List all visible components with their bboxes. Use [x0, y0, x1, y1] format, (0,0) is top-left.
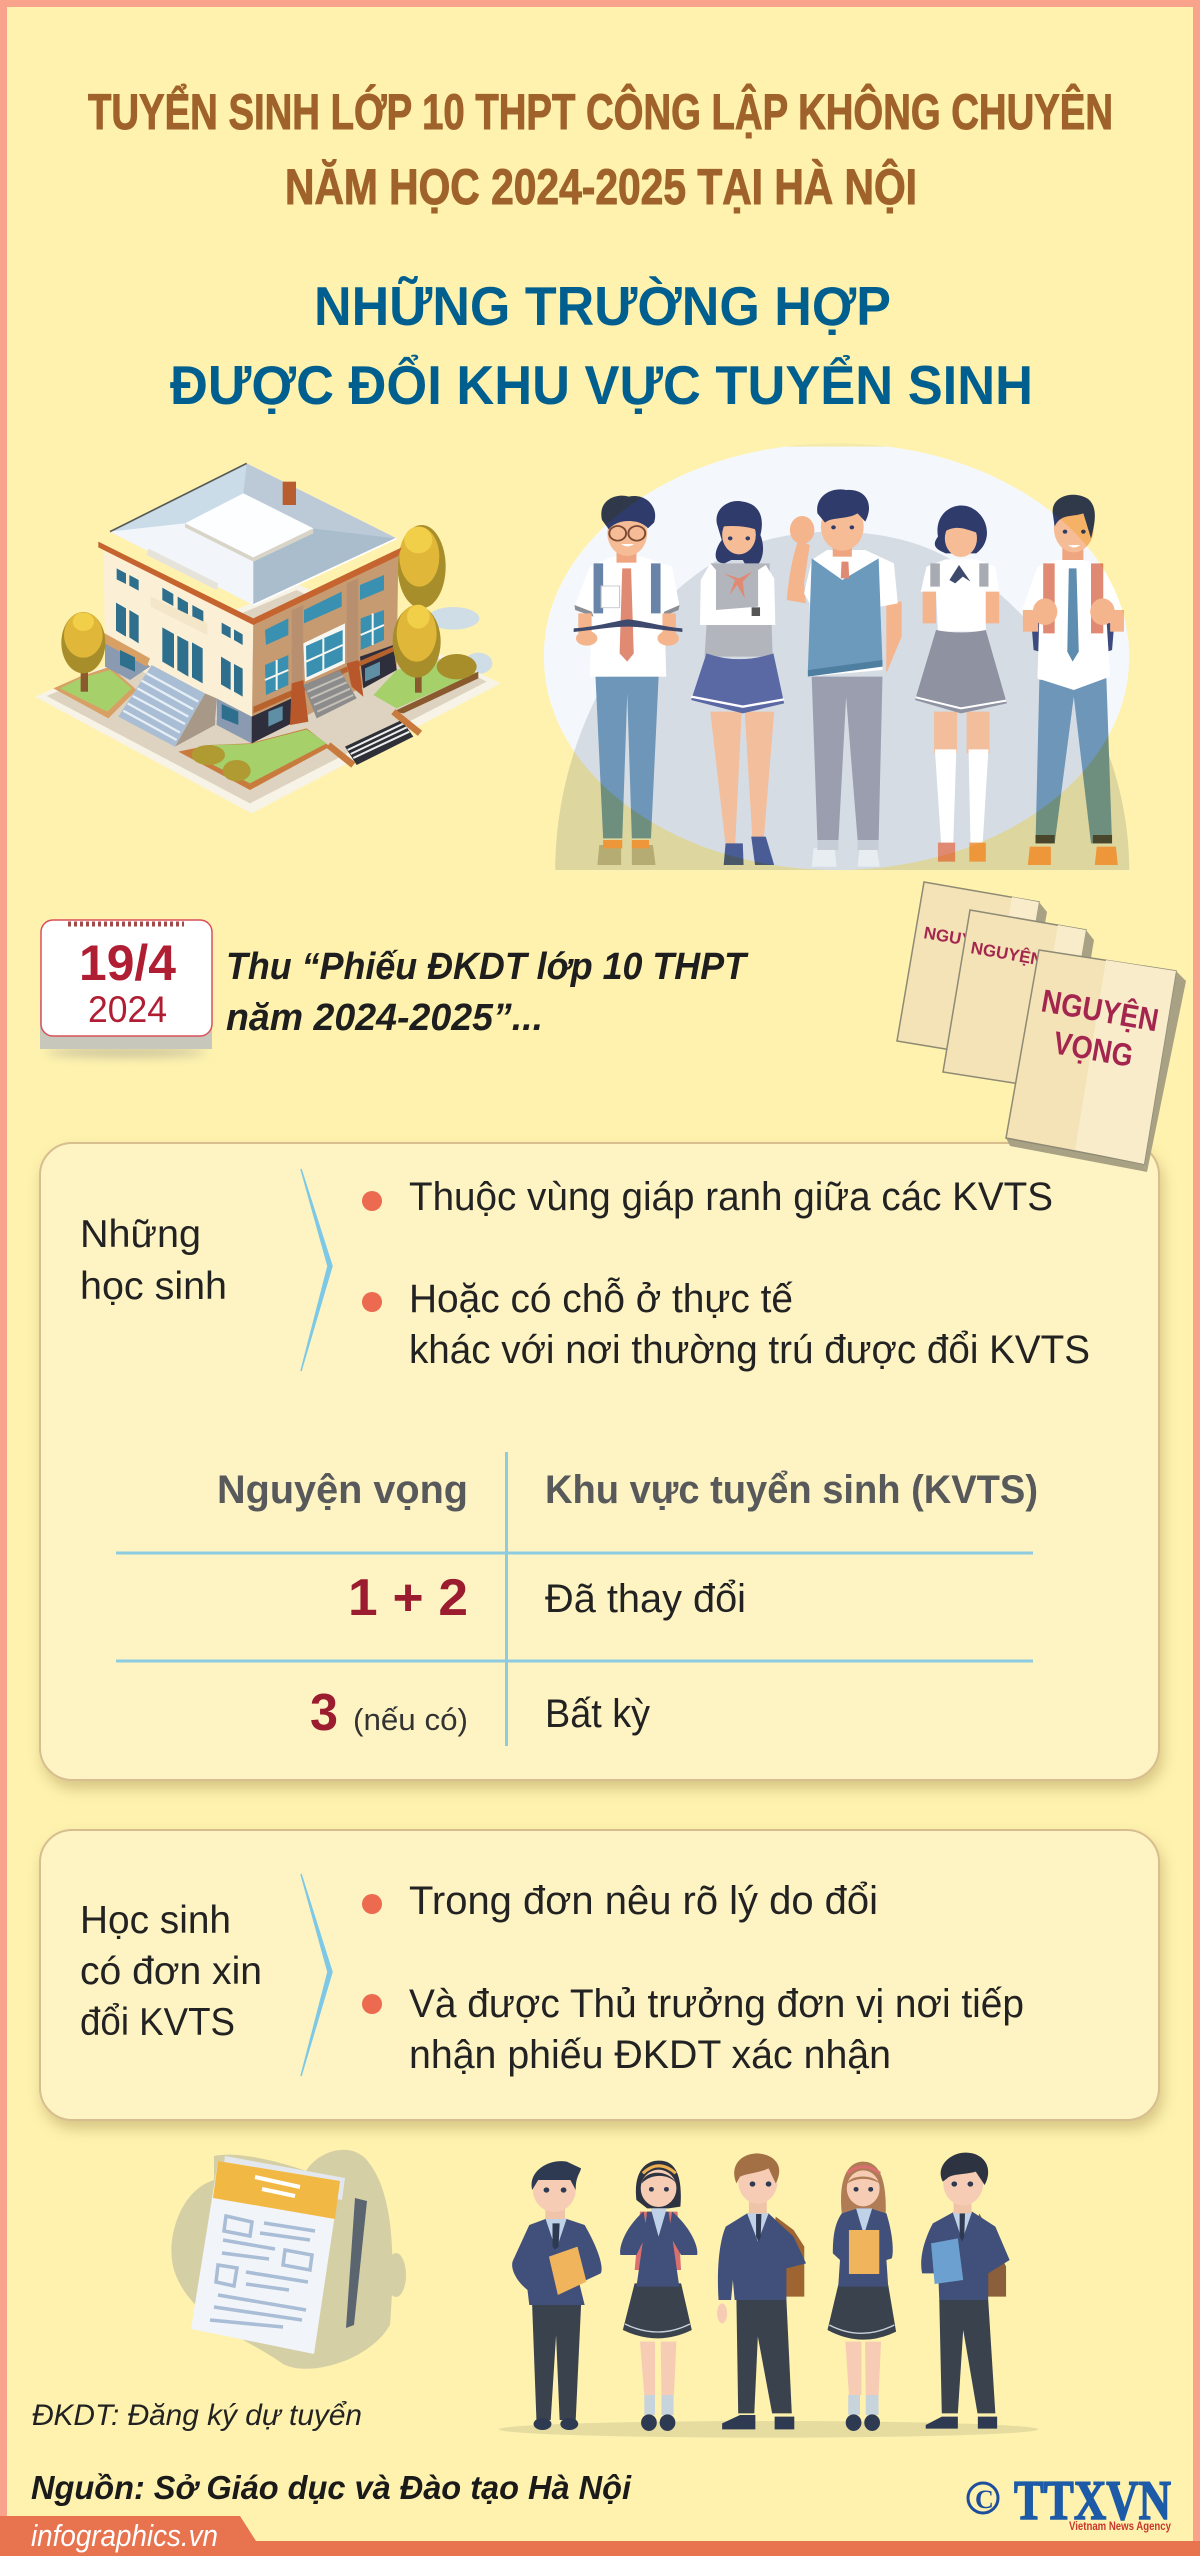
eave [98, 542, 402, 625]
logo: TTXVN [968, 2470, 1171, 2533]
icon: wish forms stack [897, 882, 1186, 1172]
label: Học sinh có đơn xin đổi KVTS: có đơn xin [80, 1950, 262, 1993]
label: Học sinh có đơn xin đổi KVTS [80, 1899, 262, 2044]
subtitle: cases allowed to change area: ĐƯỢC ĐỔI KHU VỰC TUYỂN SINH [170, 354, 1033, 416]
table: wishes and admission areas: Nguyện vọng [217, 1468, 468, 1512]
bullet list: conditions: Thuộc vùng giáp ranh giữa các KVTS [409, 1175, 1053, 1219]
icon: calendar date [40, 920, 212, 1057]
label: Những học sinh [80, 1213, 227, 1308]
illustration: five students in navy uniforms [499, 2153, 1038, 2438]
student 1 [574, 496, 682, 865]
bullet list: requirements [362, 1879, 1024, 2077]
student 2 [691, 501, 784, 865]
student 5 [921, 2153, 1010, 2429]
left wall [103, 547, 253, 743]
student 1 [512, 2161, 602, 2430]
logo: TTXVN: C [975, 2485, 994, 2514]
title: admission heading [88, 83, 1113, 215]
icon: calendar date: 2024 [88, 989, 167, 1030]
right wall [252, 553, 398, 743]
panel: students in border zones [40, 1143, 1159, 1780]
table: wishes and admission areas: 3 [310, 1684, 338, 1742]
bullet list: requirements: nhận phiếu ĐKDT xác nhận [409, 2033, 891, 2077]
stairs [175, 693, 217, 747]
text: collection of registration forms [226, 946, 749, 1039]
text: collection of registration forms: năm 2024-2025”... [226, 997, 543, 1039]
bullet list: conditions: Hoặc có chỗ ở thực tế [409, 1276, 793, 1321]
illustration: five students in summer uniforms [506, 443, 1179, 872]
source line: Nguồn: Sở Giáo dục và Đào tạo Hà Nội [31, 2469, 632, 2506]
student 4 [915, 506, 1007, 862]
bullet list: conditions: khác với nơi thường trú được đổi KVTS [409, 1328, 1090, 1372]
bullet list: conditions [362, 1175, 1090, 1372]
student 3 [787, 489, 902, 867]
bullet list: requirements: Trong đơn nêu rõ lý do đổi [409, 1879, 878, 1923]
icon: calendar date: 19/4 [79, 935, 176, 991]
icon: wish forms stack: VỌNG [1051, 1024, 1136, 1074]
footer bar with site name [0, 2516, 1200, 2556]
left tree [61, 612, 105, 692]
columns [290, 605, 308, 725]
label: Những học sinh: học sinh [80, 1265, 227, 1308]
student 3 [717, 2153, 806, 2429]
title: admission heading: NĂM HỌC 2024-2025 TẠI HÀ NỘI [285, 158, 917, 215]
tinted yellow wash outside the circle [506, 443, 1179, 872]
roof [110, 463, 397, 605]
table: wishes and admission areas: Bất kỳ [545, 1692, 650, 1736]
logo: TTXVN: Vietnam News Agency [1069, 2519, 1171, 2533]
student 4 [827, 2162, 896, 2431]
front right tree [393, 605, 477, 693]
label: Học sinh có đơn xin đổi KVTS: Học sinh [80, 1899, 231, 1942]
icon: wish forms stack: NGUYỆ [922, 923, 985, 952]
bullet list: requirements: Và được Thủ trưởng đơn vị nơi tiếp [409, 1982, 1024, 2026]
icon: wish forms stack: NGUYỆN V [969, 938, 1061, 972]
note: abbreviation: ĐKDT: Đăng ký dự tuyển [32, 2399, 362, 2432]
back tree [398, 525, 446, 608]
icon: isometric school building [35, 463, 501, 813]
footer bar with site name: infographics.vn [31, 2518, 218, 2553]
label: Học sinh có đơn xin đổi KVTS: đổi KVTS [80, 2001, 235, 2044]
table: wishes and admission areas: 1 + 2 [348, 1569, 468, 1627]
icon: document and pen [171, 2150, 406, 2369]
table: wishes and admission areas: (nếu có) [353, 1702, 468, 1737]
student 2 [620, 2161, 697, 2431]
table: wishes and admission areas: Khu vực tuyển sinh (KVTS) [545, 1468, 1038, 1512]
table: wishes and admission areas [116, 1452, 1038, 1746]
student 5 [1022, 495, 1125, 865]
label: Những học sinh: Những [80, 1213, 201, 1256]
subtitle: cases allowed to change area: NHỮNG TRƯỜNG HỢP [314, 275, 891, 337]
left windows [116, 568, 243, 725]
panel: students with request letter [40, 1830, 1159, 2120]
arrow: chevron [301, 1874, 332, 2076]
right windows [265, 618, 288, 645]
subtitle: cases allowed to change area [170, 275, 1033, 416]
arrow: chevron [301, 1169, 332, 1371]
table: wishes and admission areas: Đã thay đổi [545, 1577, 746, 1621]
text: collection of registration forms: Thu “Phiếu ĐKDT lớp 10 THPT [226, 946, 749, 988]
icon: wish forms stack: NGUYỆN [1039, 982, 1161, 1038]
